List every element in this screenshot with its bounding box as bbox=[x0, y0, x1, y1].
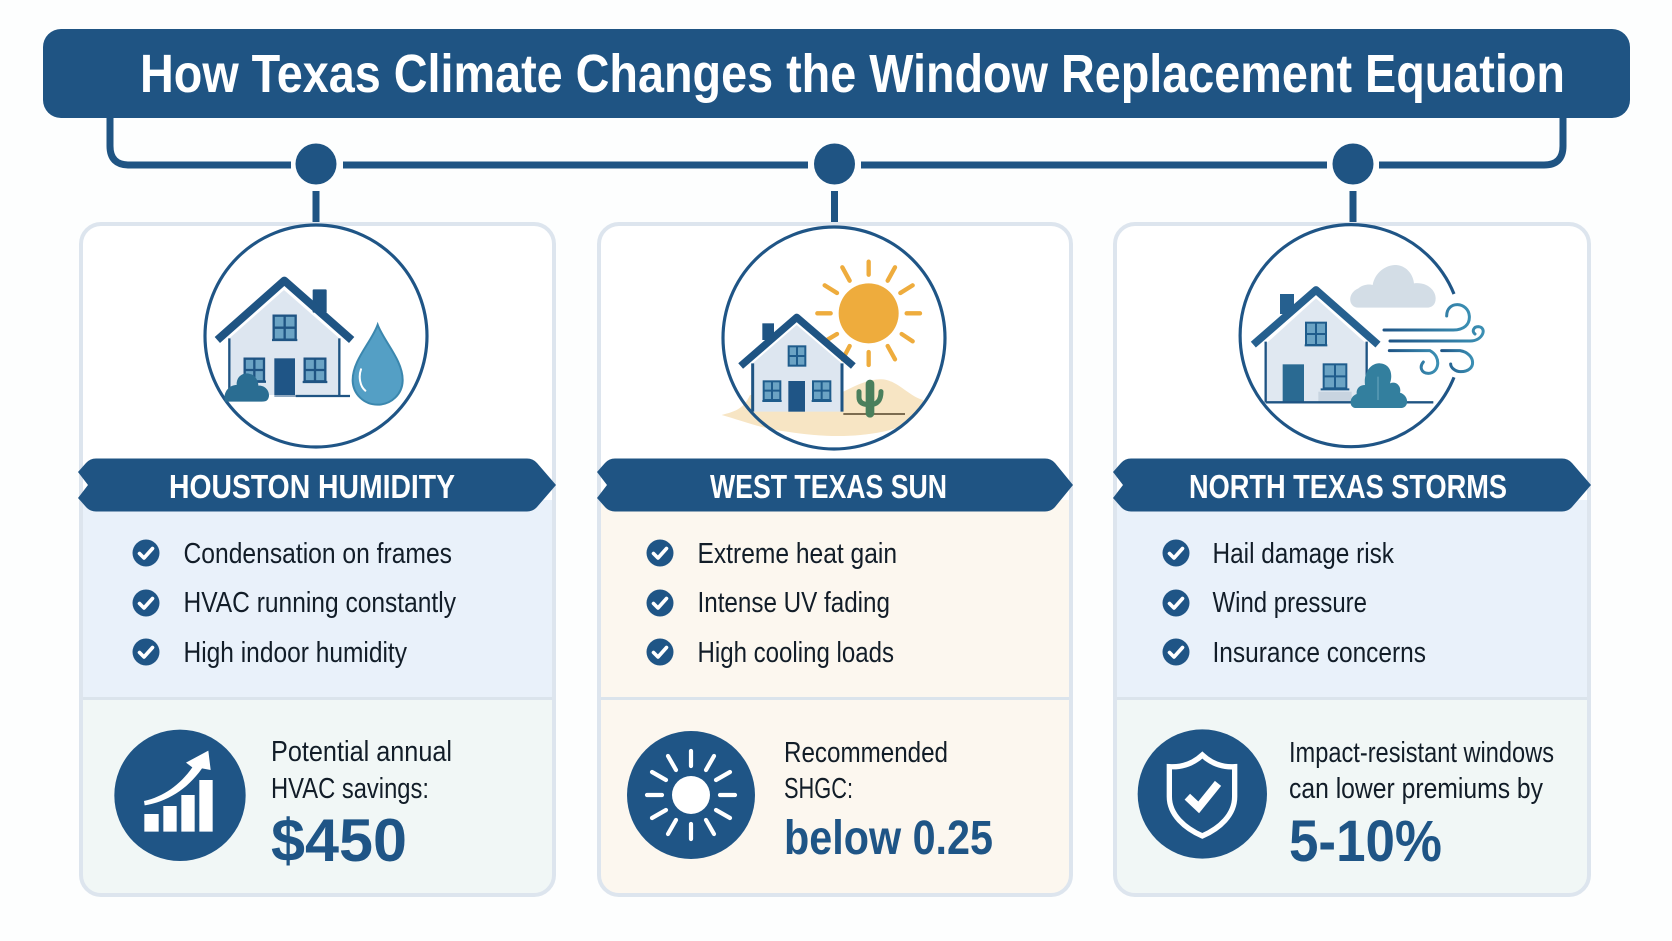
ribbon heading bbox=[78, 458, 556, 512]
icon: rising bar chart bbox=[114, 730, 246, 861]
checklist: HVAC running constantly bbox=[184, 587, 456, 619]
icon: sun badge bbox=[627, 731, 755, 859]
insurance callout: Impact-resistant windows bbox=[1289, 737, 1554, 769]
checklist: Intense UV fading bbox=[698, 587, 890, 619]
icon: house with cloud and wind bbox=[1240, 225, 1483, 447]
checklist: Wind pressure bbox=[1212, 587, 1367, 619]
SHGC callout: below 0.25 bbox=[784, 812, 993, 865]
checklist: Insurance concerns bbox=[1212, 637, 1426, 669]
ribbon heading: NORTH TEXAS STORMS bbox=[1189, 468, 1507, 505]
insurance callout: 5-10% bbox=[1289, 809, 1442, 874]
savings callout: $450 bbox=[271, 807, 407, 874]
checklist bbox=[1162, 538, 1426, 669]
checklist: High indoor humidity bbox=[184, 637, 407, 669]
panel: West Texas sun bbox=[597, 224, 1073, 895]
icon: house with water drop bbox=[205, 225, 427, 447]
connector lines and nodes bbox=[110, 118, 1563, 226]
insurance callout bbox=[1289, 737, 1554, 874]
checklist: Hail damage risk bbox=[1212, 538, 1394, 570]
SHGC callout: SHGC: bbox=[784, 773, 853, 805]
insurance callout: can lower premiums by bbox=[1289, 773, 1543, 805]
savings callout: HVAC savings: bbox=[271, 773, 429, 805]
checklist: High cooling loads bbox=[698, 637, 894, 669]
ribbon heading: HOUSTON HUMIDITY bbox=[169, 468, 455, 505]
savings callout: Potential annual bbox=[271, 736, 452, 768]
icon: house with sun and cactus bbox=[722, 227, 945, 449]
checklist bbox=[132, 538, 456, 669]
icon: shield badge bbox=[1138, 729, 1267, 859]
checklist: Extreme heat gain bbox=[698, 538, 897, 570]
panel: North Texas storms bbox=[1113, 224, 1591, 895]
ribbon heading bbox=[1113, 458, 1591, 512]
SHGC callout bbox=[784, 737, 993, 865]
title banner bbox=[43, 29, 1630, 118]
panel: Houston humidity bbox=[78, 224, 556, 895]
checklist bbox=[646, 538, 897, 669]
SHGC callout: Recommended bbox=[784, 737, 948, 769]
ribbon heading bbox=[597, 458, 1073, 512]
ribbon heading: WEST TEXAS SUN bbox=[710, 468, 947, 505]
savings callout bbox=[271, 736, 452, 874]
checklist: Condensation on frames bbox=[184, 538, 452, 570]
